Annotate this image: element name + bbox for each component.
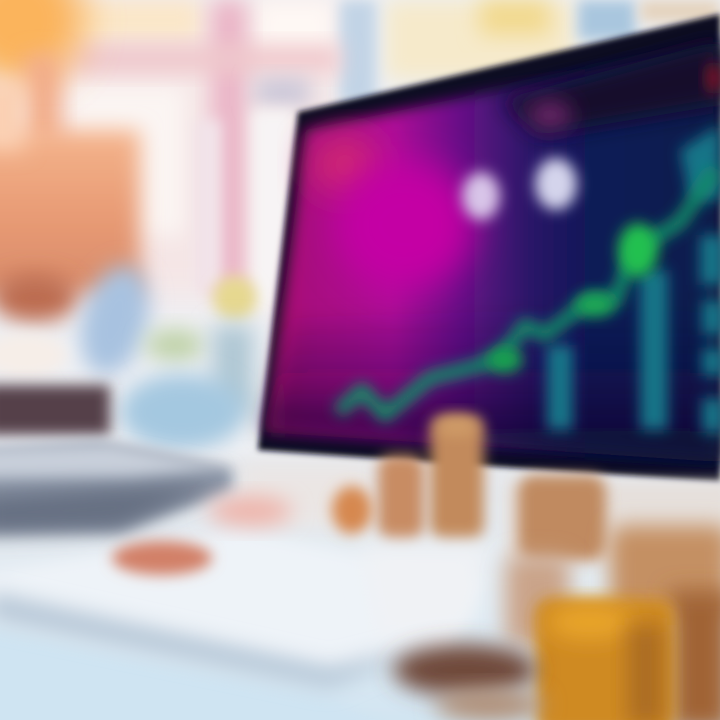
monitor bezel xyxy=(258,14,720,482)
foreground amber jar xyxy=(535,598,675,720)
foreground dark wood xyxy=(393,644,545,720)
teal bars xyxy=(547,125,720,433)
background: blue chair, plant, yellow lamp and globe xyxy=(70,258,257,450)
pink erasers on the desk xyxy=(112,496,292,575)
monitor screen xyxy=(266,44,720,462)
screen top dark band xyxy=(500,40,720,135)
screen lower shading xyxy=(262,300,720,462)
white data dots xyxy=(462,158,577,220)
screen small red mark xyxy=(706,62,720,94)
background: orange glow and peach wall xyxy=(0,0,140,322)
coin stacks in front of the monitor xyxy=(332,414,484,540)
green growth line xyxy=(338,170,715,415)
screen top-left pink glow xyxy=(311,137,379,193)
notepad: pale sheet on the desk xyxy=(0,530,480,688)
foreground coin stacks xyxy=(505,475,720,720)
screen faint header dots xyxy=(528,101,572,129)
background: white mug and dark shelf xyxy=(0,333,110,435)
monitor xyxy=(258,14,720,482)
window frame: pink cross bars xyxy=(70,0,340,310)
desk surface xyxy=(0,458,720,720)
screen magenta glow xyxy=(335,160,475,290)
white cup and right side desk xyxy=(360,482,720,640)
keyboard: dark grey slab on the left xyxy=(0,442,232,534)
